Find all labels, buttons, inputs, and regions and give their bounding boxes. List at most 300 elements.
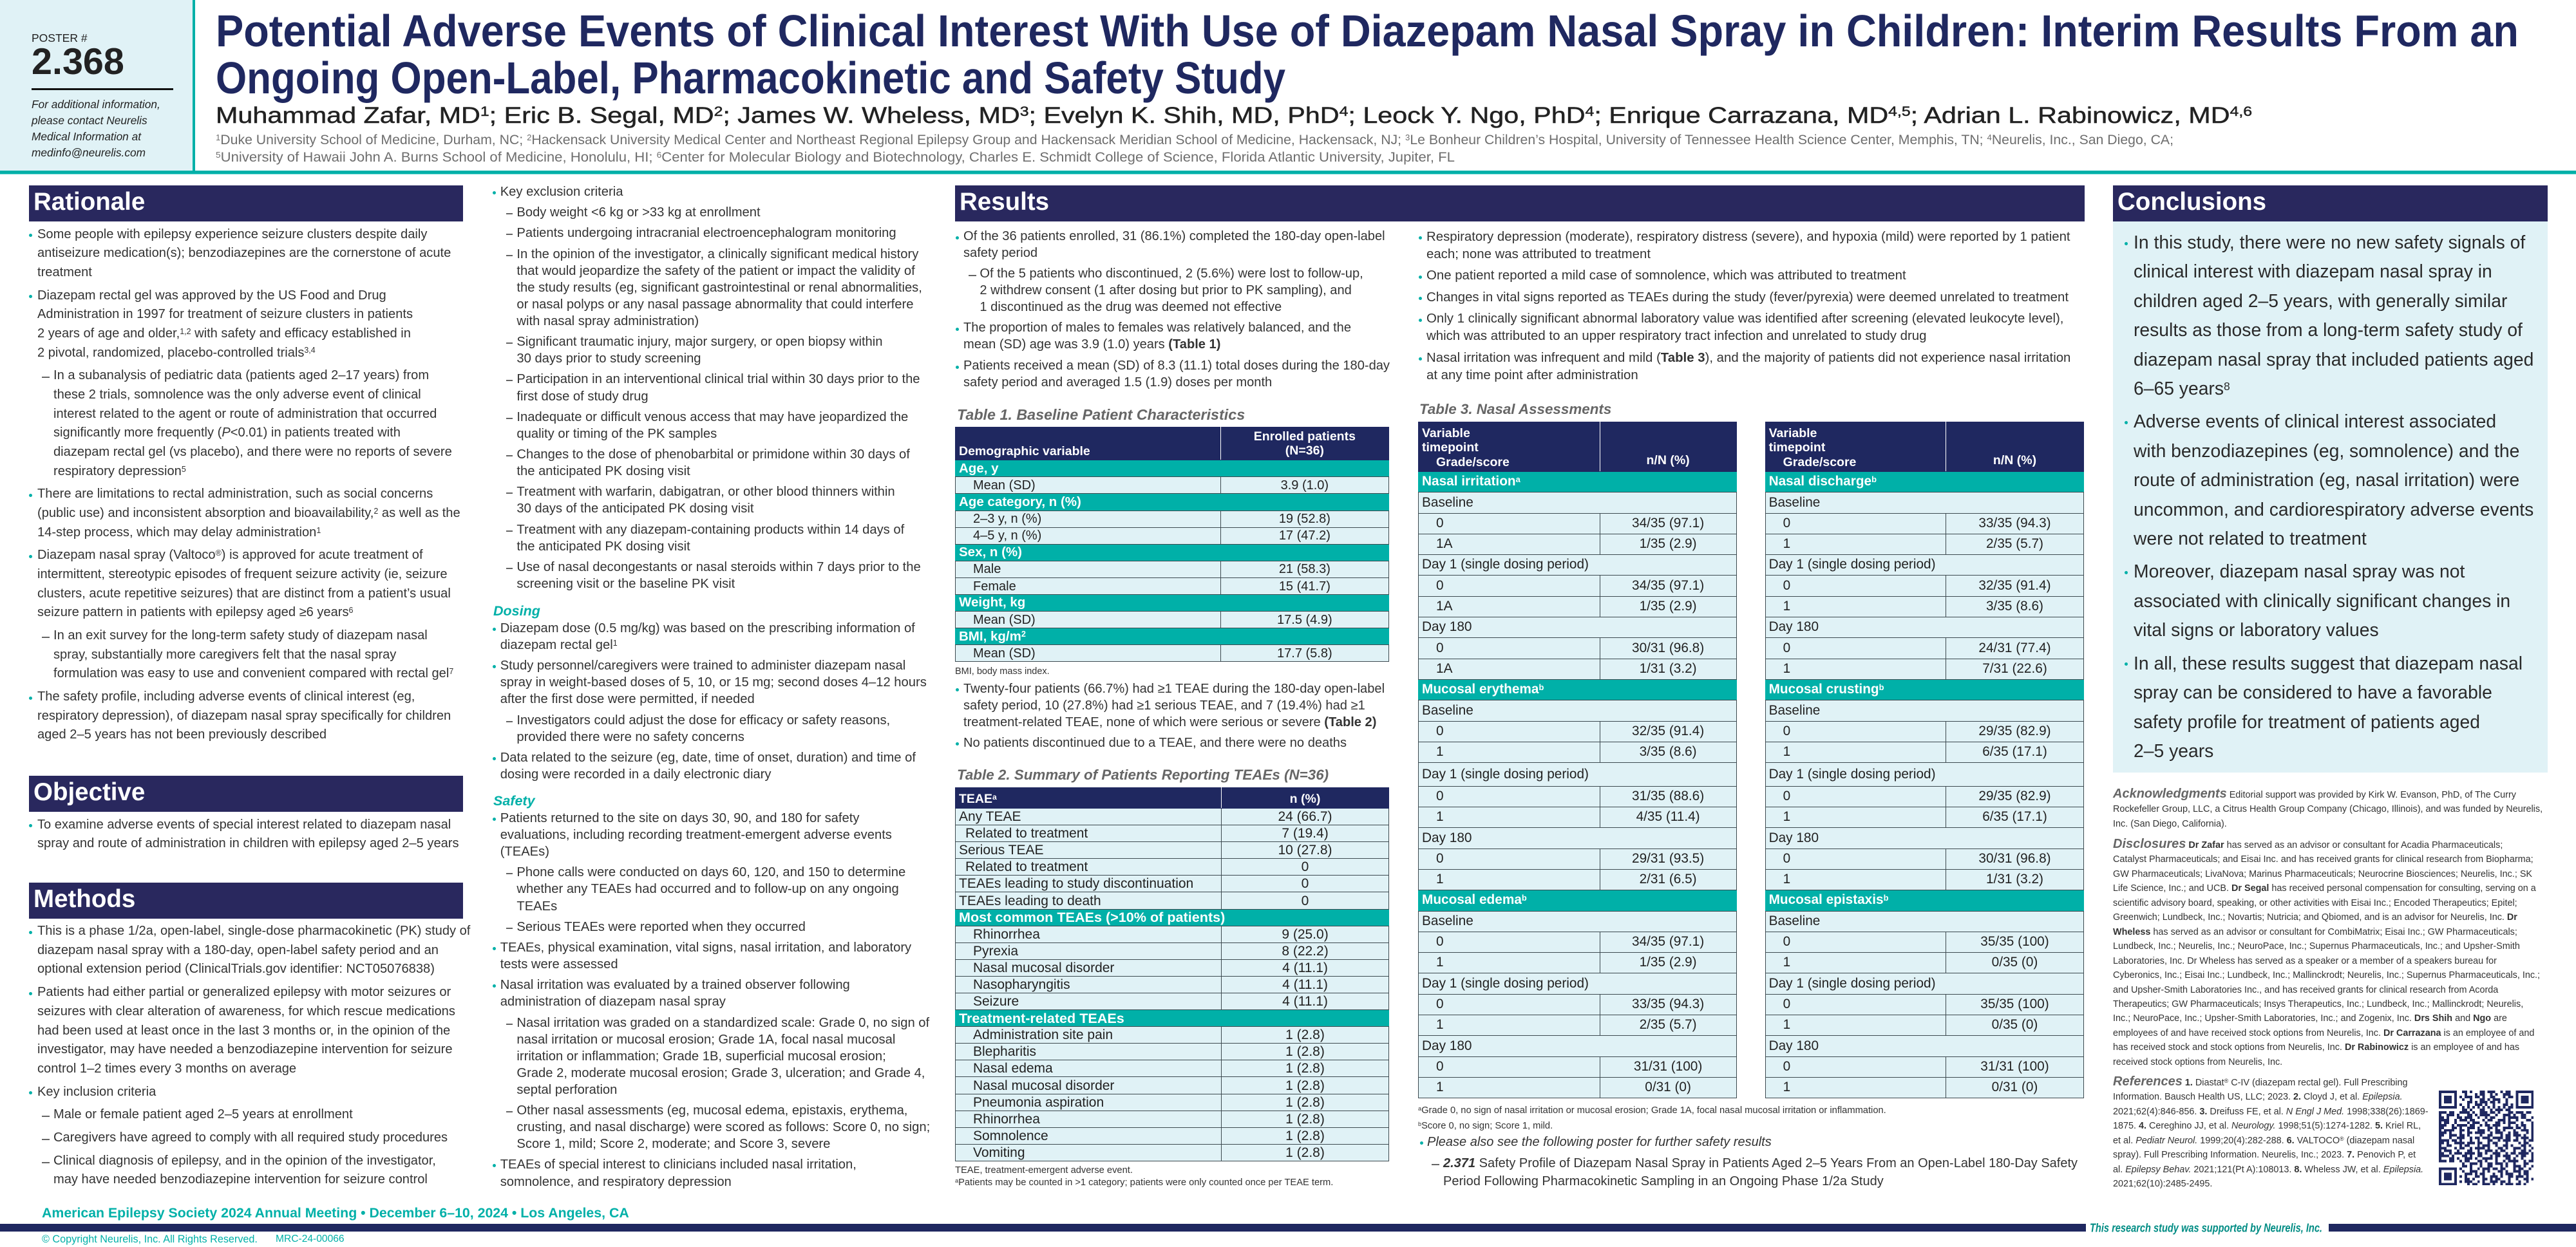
affiliations line 1: 3 xyxy=(1405,133,1410,142)
table 1: baseline characteristics: 17.5 (4.9) xyxy=(1277,613,1332,627)
text block: dosing: provided there were no safety concerns xyxy=(516,730,744,744)
table 3: nasal assessments right: 7/31 (22.6) xyxy=(1982,661,2047,676)
heading: Rationale xyxy=(29,185,463,221)
table 2: TEAE summary: Somnolence xyxy=(973,1129,1048,1143)
table 2: TEAE summary: Rhinorrhea xyxy=(973,1112,1040,1127)
text block: safety: evaluations, including recording treatment-emergent adverse events xyxy=(500,828,892,842)
text block: methods bullets: optional extension period (ClinicalTrials.gov identifier: NCT05076838) xyxy=(37,962,435,976)
text block: disclosures: Laboratories, Inc. Dr Wheless has served as a speaker or a member of a speakers bureau for xyxy=(2113,956,2497,966)
affiliations line 1: 1 xyxy=(216,133,220,142)
text block: rationale bullets: 2 years of age and older,1,2 with safety and efficacy established in xyxy=(37,326,411,341)
text block: TEAE bullets xyxy=(956,682,1385,750)
authors: 1 xyxy=(480,104,489,119)
text block: dosing: Data related to the seizure (eg, date, time of onset, duration) and time of xyxy=(500,751,916,765)
footnote: table 1: BMI, body mass index. xyxy=(955,666,1050,676)
text block: disposition bullets: safety period xyxy=(963,246,1037,260)
table 1: baseline characteristics: Male xyxy=(973,562,1001,576)
table 3: nasal assessments right: Baseline xyxy=(1769,914,1820,928)
table 3: nasal assessments right: 1 xyxy=(1783,1017,1790,1032)
text block: safety findings bullets: One patient reported a mild case of somnolence, which was attributed to treatment xyxy=(1426,268,1906,283)
table 2: TEAE summary: Related to treatment xyxy=(965,826,1088,841)
copyright: © Copyright Neurelis, Inc. All Rights Reserved. xyxy=(42,1233,258,1245)
table 3: nasal assessments left: 0 xyxy=(1436,934,1444,949)
table 3: nasal assessments right: 0 xyxy=(1783,934,1790,949)
table 1: baseline characteristics: 21 (58.3) xyxy=(1279,562,1331,576)
table 3: nasal assessments left: 34/35 (97.1) xyxy=(1632,516,1704,530)
table 2: TEAE summary: 1 (2.8) xyxy=(1285,1095,1325,1110)
panel: conclusions xyxy=(2113,185,2548,773)
authors: 4,5 xyxy=(1888,104,1911,119)
table 3: nasal assessments right: n/N (%) xyxy=(1993,453,2036,467)
text block: rationale bullets: formulation was easy to use and convenient compared with rectal gel7 xyxy=(53,666,453,680)
heading: Methods xyxy=(29,883,463,919)
table 2: TEAE summary: Nasal edema xyxy=(973,1061,1053,1076)
text block: TEAE bullets: treatment-related TEAE, none of which were serious or severe (Table 2) xyxy=(963,715,1376,729)
table 2: TEAE summary: Any TEAE xyxy=(959,809,1021,824)
table 1: baseline characteristics: Enrolled patients xyxy=(1254,429,1356,444)
text block: key exclusion criteria: screening visit or the baseline PK visit xyxy=(516,577,735,591)
table 3: nasal assessments right: 32/35 (91.4) xyxy=(1978,578,2051,593)
text block: rationale bullets: seizure pattern in patients with epilepsy aged ≥6 years6 xyxy=(37,605,353,619)
text block: objective xyxy=(29,818,459,850)
text block: conclusions bullets: spray can be considered to have a favorable xyxy=(2134,682,2492,702)
text block: references: Information. Bausch Health US, LLC; 2023. 2. Cloyd J, et al. Epilepsia. xyxy=(2113,1092,2403,1102)
table 3: nasal assessments right: 0/31 (0) xyxy=(1992,1080,2038,1094)
text block: disclosures: employees of and have received stock options from Neurelis, Inc. Dr Carrazana is an employee of and xyxy=(2113,1028,2534,1038)
copyright: MRC-24-00066 xyxy=(276,1233,345,1244)
table 2: TEAE summary: Seizure xyxy=(973,994,1019,1009)
table 2: TEAE summary: 1 (2.8) xyxy=(1285,1044,1325,1059)
text block: disposition bullets: 2 withdrew consent (1 after dosing but prior to PK sampling), and xyxy=(980,283,1352,297)
text block: safety xyxy=(493,811,930,1189)
table 3: nasal assessments right xyxy=(1765,422,2084,1098)
table 2: TEAE summary: 4 (11.1) xyxy=(1282,977,1328,992)
text block: disclosures: received stock options from Neurelis, Inc. xyxy=(2113,1057,2282,1067)
text block: disclosures: Therapeutics; GW Pharmaceuticals; Insys Therapeutics, Inc.; Lundbeck, Inc.; Mallinckrodt; Neurelis, xyxy=(2113,999,2523,1009)
text block: rationale bullets: spray, substantially more caregivers felt that the nasal spray xyxy=(53,648,396,662)
text block: rationale bullets: Diazepam nasal spray (Valtoco®) is approved for acute treatment of xyxy=(37,548,423,562)
text block: conclusions bullets: diazepam nasal spray that included patients aged xyxy=(2134,349,2533,370)
text block: acknowledgments xyxy=(2112,787,2543,829)
table 3: nasal assessments left: Mucosal erythemab xyxy=(1422,682,1544,697)
table 1: baseline characteristics: Mean (SD) xyxy=(973,613,1036,627)
heading: Results: Results xyxy=(960,188,1049,216)
text block: disposition bullets: Of the 36 patients enrolled, 31 (86.1%) completed the 180-day open-label xyxy=(963,229,1385,243)
table 3: nasal assessments left: 1 xyxy=(1436,1017,1444,1032)
text block: methods bullets: This is a phase 1/2a, open-label, single-dose pharmacokinetic (PK) study of xyxy=(37,924,470,938)
text block: rationale bullets: (public use) and inconsistent absorption and bioavailability,2 as well as the xyxy=(37,506,460,520)
affiliations line 2: University of Hawaii John A. Burns School of Medicine, Honolulu, HI; xyxy=(221,150,657,165)
heading: Objective xyxy=(29,776,463,812)
table 3: nasal assessments left: 34/35 (97.1) xyxy=(1632,934,1704,949)
table 3: nasal assessments right: 0 xyxy=(1783,851,1790,866)
heading: table 1 title: Table 1. Baseline Patient Characteristics xyxy=(957,406,1245,423)
text block: rationale bullets: respiratory depression), of diazepam nasal spray specifically for children xyxy=(37,709,451,723)
text block: disclosures: and Upsher-Smith Laboratories Inc., and has received grants for clinical research from Acorda xyxy=(2113,985,2498,995)
table 3: nasal assessments left: Day 180 xyxy=(1422,830,1472,845)
table 3: nasal assessments right: 0/35 (0) xyxy=(1992,955,2038,970)
text block: key exclusion criteria: the study results (eg, significant gastrointestinal or renal abnormalities, xyxy=(516,281,922,295)
title line 2: Ongoing Open-Label, Pharmacokinetic and Safety Study xyxy=(216,53,1285,103)
table 3: nasal assessments left: Baseline xyxy=(1422,914,1473,928)
text block: rationale bullets: 14-step process, which may delay administration1 xyxy=(37,525,321,539)
footnote: table 2: aPatients may be counted in >1 category; patients were only counted once per TEAE term. xyxy=(955,1177,1333,1188)
text block: safety: irritation or inflammation; Grade 1B, superficial mucosal erosion; xyxy=(516,1049,886,1064)
table 3: nasal assessments left: 1 xyxy=(1436,744,1444,759)
panel: methods xyxy=(29,883,470,1186)
table 3: nasal assessments left: 0 xyxy=(1436,851,1444,866)
table 2: TEAE summary: 4 (11.1) xyxy=(1282,994,1328,1009)
affiliations line 1: 4 xyxy=(1987,133,1992,142)
text block: key exclusion criteria: Inadequate or difficult venous access that may have jeopardized the xyxy=(516,410,908,424)
table 2: TEAE summary: Nasal mucosal disorder xyxy=(973,1078,1114,1093)
table 3: nasal assessments right: Day 1 (single dosing period) xyxy=(1769,557,1936,572)
text block: disclosures: Life Science, Inc.; and UCB. Dr Segal has received personal compensation for consulting, serving on a xyxy=(2113,883,2536,894)
text block: dosing: after the first dose were permitted, if needed xyxy=(500,692,755,706)
table 3: nasal assessments left: 1A xyxy=(1436,536,1452,551)
table 2: TEAE summary xyxy=(955,787,1389,1161)
table 3: nasal assessments left: 0 xyxy=(1436,516,1444,530)
table 3: nasal assessments right: Day 180 xyxy=(1769,1038,1819,1053)
contact note: please contact Neurelis xyxy=(32,114,147,127)
table 2: TEAE summary: 10 (27.8) xyxy=(1278,843,1332,858)
affiliations line 2: 6 xyxy=(657,150,661,160)
authors: 4,6 xyxy=(2230,104,2252,119)
table 3: nasal assessments left: 0 xyxy=(1436,578,1444,593)
text block: safety findings bullets xyxy=(1419,230,2070,382)
text block: key exclusion criteria: Use of nasal decongestants or nasal steroids within 7 days prior to the xyxy=(516,560,921,574)
table 2: TEAE summary: Blepharitis xyxy=(973,1044,1036,1059)
text block: disclosures: Wheless has served as an advisor or consultant for CombiMatrix; Eisai Inc.; GW Pharmaceuticals; xyxy=(2113,927,2517,937)
text block: rationale bullets: clusters, acute repetitive seizures) that are distinct from a patient’s usual xyxy=(37,586,451,601)
text block: rationale bullets: intermittent, stereotypic episodes of frequent seizure activity (ie, seizure xyxy=(37,567,448,581)
affiliations line 1: Hackensack University Medical Center and Northeast Regional Epilepsy Group and Hackensack Meridian School of Medicine, Hackensack, NJ; xyxy=(531,133,1405,147)
table 2: TEAE summary: 1 (2.8) xyxy=(1285,1129,1325,1143)
table 1: baseline characteristics: 19 (52.8) xyxy=(1279,512,1331,526)
text block: key exclusion criteria: 30 days prior to study screening xyxy=(516,352,701,366)
table 1: baseline characteristics: 17 (47.2) xyxy=(1279,529,1331,543)
text block: safety findings bullets: Respiratory depression (moderate), respiratory distress (severe), and hypoxia (mild) were reported by 1 patient xyxy=(1426,230,2070,244)
table 3: nasal assessments left: 1/31 (3.2) xyxy=(1640,661,1697,676)
table 3: nasal assessments right: 1 xyxy=(1783,599,1790,614)
authors: Muhammad Zafar, MD xyxy=(216,103,440,128)
table 3: nasal assessments right: 0 xyxy=(1783,1059,1790,1074)
text block: disposition bullets xyxy=(956,229,1390,389)
heading: Results xyxy=(955,185,2084,221)
table 2: TEAE summary: 9 (25.0) xyxy=(1282,927,1329,942)
text block: conclusions bullets: with benzodiazepines (eg, somnolence) and the xyxy=(2134,440,2519,461)
text block: conclusions bullets: associated with clinically significant changes in xyxy=(2134,590,2510,611)
text block: safety: Other nasal assessments (eg, mucosal edema, epistaxis, erythema, xyxy=(516,1103,907,1118)
authors: ; Adrian L. Rabinowicz, MD xyxy=(1911,103,2230,128)
text block: conclusions bullets: were not related to treatment xyxy=(2134,528,2367,548)
contact note xyxy=(31,98,160,159)
table 3: nasal assessments left: 1/35 (2.9) xyxy=(1640,599,1697,614)
text block: key exclusion criteria: In the opinion of the investigator, a clinically significant medical history xyxy=(516,247,918,261)
text block: disposition bullets: 1 discontinued as the drug was deemed not effective xyxy=(980,300,1282,314)
table 2: TEAE summary: TEAEs leading to study discontinuation xyxy=(959,876,1193,891)
table 3: nasal assessments left: 1/35 (2.9) xyxy=(1640,536,1697,551)
table 2: TEAE summary: Serious TEAE xyxy=(959,843,1044,858)
affiliations line 1: 2 xyxy=(527,133,531,142)
text block: rationale bullets: In an exit survey for the long-term safety study of diazepam nasal xyxy=(53,628,428,642)
heading: Rationale: Rationale xyxy=(33,188,145,216)
text block: dosing: Investigators could adjust the dose for efficacy or safety reasons, xyxy=(516,713,890,727)
table 2: TEAE summary: Administration site pain xyxy=(973,1027,1113,1042)
text block: methods bullets: control 1–2 times every 3 months on average xyxy=(37,1062,296,1076)
text block: methods bullets: diazepam nasal spray with a 180-day, open-label safety period and an xyxy=(37,943,439,957)
table 3: nasal assessments left: Day 1 (single dosing period) xyxy=(1422,767,1589,782)
header: title, authors and affiliations xyxy=(216,6,2519,165)
footnote: table 2 xyxy=(955,1165,1333,1188)
authors: 2 xyxy=(714,104,723,119)
text block: disclosures: Disclosures Dr Zafar has served as an advisor or consultant for Acadia Pharmaceuticals; xyxy=(2113,837,2503,851)
text block: key exclusion criteria: Patients undergoing intracranial electroencephalogram monitoring xyxy=(516,226,896,240)
table 3: nasal assessments left: 1 xyxy=(1436,1080,1444,1094)
text block: conclusions bullets: In all, these results suggest that diazepam nasal xyxy=(2134,653,2523,673)
text block: rationale bullets: treatment xyxy=(37,265,92,279)
text block: safety findings bullets: at any time point after administration xyxy=(1426,368,1638,382)
text block: safety findings bullets: each; none was attributed to treatment xyxy=(1426,247,1651,261)
text block: methods bullets: Key inclusion criteria xyxy=(37,1085,156,1099)
table 3: nasal assessments right: 6/35 (17.1) xyxy=(1982,744,2047,759)
text block: safety: (TEAEs) xyxy=(500,845,549,859)
table 3: nasal assessments right: 29/35 (82.9) xyxy=(1978,724,2051,738)
text block: disposition bullets: safety period and averaged 1.5 (1.9) doses per month xyxy=(963,375,1272,389)
text block: disposition bullets: Patients received a mean (SD) of 8.3 (11.1) total doses during the 180-day xyxy=(963,359,1390,373)
table 1: baseline characteristics: 4–5 y, n (%) xyxy=(973,529,1041,543)
panel: acknowledgments, disclosures, references xyxy=(2112,787,2543,1189)
table 3: nasal assessments left: 0/31 (0) xyxy=(1645,1080,1691,1094)
text block: rationale bullets: There are limitations to rectal administration, such as social concerns xyxy=(37,487,433,501)
table 3: nasal assessments right: Variable xyxy=(1769,426,1817,440)
table 3: nasal assessments left: 0 xyxy=(1436,997,1444,1011)
table 3: nasal assessments right: 0 xyxy=(1783,578,1790,593)
text block: methods bullets: investigator, may have needed a benzodiazepine intervention for seizure xyxy=(37,1042,453,1056)
text block: acknowledgments: Acknowledgments Editorial support was provided by Kirk W. Evanson, PhD, of The Curry xyxy=(2113,787,2516,801)
table 3: nasal assessments left: timepoint xyxy=(1422,440,1479,455)
text block: dosing: Study personnel/caregivers were trained to administer diazepam nasal xyxy=(500,659,905,673)
text block: disclosures: GW Pharmaceuticals; LivaNova; Marinus Pharmaceuticals; Neurocrine Biosciences; Neurelis, Inc.; SK xyxy=(2113,869,2532,879)
table 3: nasal assessments right: 33/35 (94.3) xyxy=(1978,516,2051,530)
text block: dosing: spray in weight-based doses of 5, 10, or 15 mg; second doses 4–12 hours xyxy=(500,675,927,689)
subheading: Dosing: Dosing xyxy=(493,603,540,619)
text block: further safety results pointer xyxy=(1420,1135,2078,1188)
text block: key exclusion criteria: Treatment with any diazepam-containing products within 14 days of xyxy=(516,523,904,537)
text block: safety: Nasal irritation was graded on a standardized scale: Grade 0, no sign of xyxy=(516,1016,929,1030)
icon: QR code xyxy=(2439,1091,2533,1185)
table 2: TEAE summary: Rhinorrhea xyxy=(973,927,1040,942)
text block: rationale bullets: 2 pivotal, randomized, placebo-controlled trials3,4 xyxy=(37,346,316,360)
table 3: nasal assessments right: 1/31 (3.2) xyxy=(1986,872,2043,886)
table 2: TEAE summary: 0 xyxy=(1302,859,1309,874)
table 1: baseline characteristics: Sex, n (%) xyxy=(959,545,1022,559)
table 3: nasal assessments right: 35/35 (100) xyxy=(1980,934,2049,949)
text block: safety: Nasal irritation was evaluated by a trained observer following xyxy=(500,978,850,992)
authors: 4 xyxy=(1340,104,1349,119)
text block: rationale bullets xyxy=(29,227,460,742)
text block: key exclusion criteria: Treatment with warfarin, dabigatran, or other blood thinners within xyxy=(516,485,895,499)
table 2: TEAE summary: 24 (66.7) xyxy=(1278,809,1332,824)
table 3: nasal assessments left: Variable xyxy=(1422,426,1470,440)
table 3: nasal assessments right: 31/31 (100) xyxy=(1980,1059,2049,1074)
table 3: nasal assessments left: 31/35 (88.6) xyxy=(1632,789,1704,803)
table 2: TEAE summary: n (%) xyxy=(1290,792,1320,806)
table 3: nasal assessments left: 31/31 (100) xyxy=(1634,1059,1702,1074)
text block: rationale bullets: In a subanalysis of pediatric data (patients aged 2–17 years) from xyxy=(53,368,429,382)
text block: disclosures xyxy=(2113,837,2540,1067)
table 2: TEAE summary: Related to treatment xyxy=(965,859,1088,874)
table 3: nasal assessments left: Day 1 (single dosing period) xyxy=(1422,557,1589,572)
text block: safety: nasal irritation or mucosal erosion; Grade 1A, focal nasal mucosal xyxy=(516,1033,895,1047)
text block: further safety results pointer: Please also see the following poster for further safety results xyxy=(1427,1135,1772,1149)
text block: references xyxy=(2113,1074,2429,1189)
table 3: nasal assessments right: 1 xyxy=(1783,809,1790,824)
text block: safety: tests were assessed xyxy=(500,957,618,971)
table 2: TEAE summary: 8 (22.2) xyxy=(1282,944,1329,959)
text block: safety: TEAEs xyxy=(516,899,557,914)
contact note: For additional information, xyxy=(32,98,160,111)
text block: disclosures: Lundbeck, Inc.; Neurelis, Inc.; NeuroPace, Inc.; Supernus Pharmaceuticals, Inc.; and Upsher-Smith xyxy=(2113,941,2520,952)
table 3: nasal assessments left: 32/35 (91.4) xyxy=(1632,724,1704,738)
text block: dosing: Diazepam dose (0.5 mg/kg) was based on the prescribing information of xyxy=(500,621,915,635)
text block: safety findings bullets: Changes in vital signs reported as TEAEs during the study (fever/pyrexia) were deemed unrelated to treatment xyxy=(1426,290,2069,305)
table 3: nasal assessments left: 2/31 (6.5) xyxy=(1640,872,1697,886)
panel: rationale xyxy=(29,185,463,742)
heading: table 2 title: Table 2. Summary of Patients Reporting TEAEs (N=36) xyxy=(957,767,1329,783)
table 3: nasal assessments left: Grade/score xyxy=(1436,455,1510,469)
table 3: nasal assessments right: 1 xyxy=(1783,872,1790,886)
table 3: nasal assessments right: 29/35 (82.9) xyxy=(1978,789,2051,803)
text block: rationale bullets: respiratory depression5 xyxy=(53,464,186,478)
text block: rationale bullets: Some people with epilepsy experience seizure clusters despite daily xyxy=(37,227,427,241)
text block: safety: administration of diazepam nasal spray xyxy=(500,995,726,1009)
table 3: nasal assessments right: 6/35 (17.1) xyxy=(1982,809,2047,824)
table 1: baseline characteristics: Mean (SD) xyxy=(973,646,1036,661)
table 3: nasal assessments left: n/N (%) xyxy=(1647,453,1690,467)
text block: references: References 1. Diastat® C-IV (diazepam rectal gel). Full Prescribing xyxy=(2113,1074,2408,1089)
table 1: baseline characteristics: Age category, n (%) xyxy=(959,494,1081,509)
heading: Methods: Methods xyxy=(33,885,135,913)
text block: references: et al. Pediatr Neurol. 1999;20(4):282-288. 6. VALTOCO® (diazepam nasal xyxy=(2113,1136,2414,1146)
text block: safety: septal perforation xyxy=(516,1083,617,1097)
table 3: nasal assessments right: 3/35 (8.6) xyxy=(1986,599,2043,614)
text block: conclusions bullets xyxy=(2113,221,2548,773)
table 3: nasal assessments left: Baseline xyxy=(1422,703,1473,718)
text block: conclusions bullets: clinical interest with diazepam nasal spray in xyxy=(2134,261,2492,281)
text block: conclusions bullets: uncommon, and cardiorespiratory adverse events xyxy=(2134,499,2533,520)
text block: acknowledgments: Rockefeller Group, LLC, a Citrus Health Group Company (Chicago, Illinois), and was funded by Neurelis, xyxy=(2113,804,2543,814)
text block: conclusions bullets: 2–5 years xyxy=(2134,740,2213,761)
text block: safety: Grade 2, moderate mucosal erosion; Grade 3, ulceration; and Grade 4, xyxy=(516,1066,925,1080)
table 3: nasal assessments right: Day 180 xyxy=(1769,830,1819,845)
text block: key exclusion criteria: the anticipated PK dosing visit xyxy=(516,464,690,478)
table 2: TEAE summary: Treatment-related TEAEs xyxy=(959,1010,1124,1026)
table 3: nasal assessments right: 1 xyxy=(1783,1080,1790,1094)
table 3: nasal assessments left: Day 1 (single dosing period) xyxy=(1422,976,1589,991)
text block: key exclusion criteria: Significant traumatic injury, major surgery, or open biopsy within xyxy=(516,335,882,349)
text block: references: al. Epilepsy Behav. 2021;121(Pt A):108013. 8. Wheless JW, et al. Epilepsia. xyxy=(2113,1165,2423,1175)
footnote: table 3: bScore 0, no sign; Score 1, mild. xyxy=(1418,1121,1553,1131)
table 3: nasal assessments right: Baseline xyxy=(1769,703,1820,718)
table 2: TEAE summary: 4 (11.1) xyxy=(1282,961,1328,975)
table 3: nasal assessments right: timepoint xyxy=(1769,440,1825,455)
table 3: nasal assessments right: 0 xyxy=(1783,516,1790,530)
table 2: TEAE summary: Nasal mucosal disorder xyxy=(973,961,1114,975)
table 1: baseline characteristics: Mean (SD) xyxy=(973,478,1036,492)
table 3: nasal assessments right: Mucosal crustingb xyxy=(1769,682,1884,697)
meeting line: American Epilepsy Society 2024 Annual Meeting • December 6–10, 2024 • Los Angeles, CA xyxy=(42,1205,629,1221)
table 2: TEAE summary: Nasopharyngitis xyxy=(973,977,1070,992)
panel: objective xyxy=(29,776,463,850)
text block: key exclusion criteria: first dose of study drug xyxy=(516,389,649,403)
text block: TEAE bullets: Twenty-four patients (66.7%) had ≥1 TEAE during the 180-day open-label xyxy=(963,682,1385,696)
table 3: nasal assessments right: 1 xyxy=(1783,536,1790,551)
table 3: nasal assessments right: Mucosal epistaxisb xyxy=(1769,892,1888,907)
table 3: nasal assessments left: 1A xyxy=(1436,599,1452,614)
table 3: nasal assessments right: 0 xyxy=(1783,789,1790,803)
table 3: nasal assessments right: 24/31 (77.4) xyxy=(1978,641,2051,655)
text block: key exclusion criteria: Participation in an interventional clinical trial within 30 days prior to the xyxy=(516,372,920,386)
affiliations line 2: Center for Molecular Biology and Biotechnology, Charles E. Schmidt College of Science, Florida Atlantic University, Jupiter, FL xyxy=(661,150,1455,165)
poster label: POSTER # xyxy=(32,32,88,44)
table 3: nasal assessments right: Day 1 (single dosing period) xyxy=(1769,767,1936,782)
table 3: nasal assessments right: 0/35 (0) xyxy=(1992,1017,2038,1032)
text block: conclusions bullets: In this study, there were no new safety signals of xyxy=(2134,232,2525,252)
text block: disclosures: Inc.; NeuroPace, Inc.; Upsher-Smith Laboratories, Inc.; and Zogenix, Inc. Drs Shih and Ngo are xyxy=(2113,1013,2507,1024)
table 2: TEAE summary: Vomiting xyxy=(973,1145,1025,1160)
text block: disposition bullets: The proportion of males to females was relatively balanced, and the xyxy=(963,321,1351,335)
footnote: table 3 xyxy=(1418,1105,1886,1131)
table 3: nasal assessments left: Day 180 xyxy=(1422,619,1472,634)
text block: rationale bullets: significantly more frequently (P<0.01) in patients treated with xyxy=(53,426,401,440)
table 3: nasal assessments left: 33/35 (94.3) xyxy=(1632,997,1704,1011)
table 3: nasal assessments right: 0 xyxy=(1783,997,1790,1011)
text block: methods bullets: may have needed benzodiazepine intervention for seizure control xyxy=(53,1172,428,1186)
text block: dosing xyxy=(493,621,927,782)
table 3: nasal assessments left: 1 xyxy=(1436,955,1444,970)
text block: further safety results pointer: 2.371 Safety Profile of Diazepam Nasal Spray in Patients Aged 2–5 Years From an Open-Label 180-Day Safety xyxy=(1443,1156,2078,1170)
table 2: TEAE summary: 0 xyxy=(1302,876,1309,891)
text block: key exclusion criteria: Body weight <6 kg or >33 kg at enrollment xyxy=(516,205,761,220)
table 3: nasal assessments right: 35/35 (100) xyxy=(1980,997,2049,1011)
table 3: nasal assessments left: 0 xyxy=(1436,641,1444,655)
table 2: TEAE summary: 1 (2.8) xyxy=(1285,1061,1325,1076)
table 2: TEAE summary: 1 (2.8) xyxy=(1285,1027,1325,1042)
table 3: nasal assessments right: 0 xyxy=(1783,724,1790,738)
authors: 3 xyxy=(1020,104,1029,119)
table 3: nasal assessments right: 2/35 (5.7) xyxy=(1986,536,2043,551)
authors: ; Eric B. Segal, MD xyxy=(489,103,714,128)
authors: ; Leock Y. Ngo, PhD xyxy=(1348,103,1586,128)
text block: safety findings bullets: which was attributed to an upper respiratory tract infection and unrelated to study drug xyxy=(1426,329,1926,343)
table 3: nasal assessments left xyxy=(1418,422,1737,1098)
table 2: TEAE summary: 1 (2.8) xyxy=(1285,1112,1325,1127)
text block: methods bullets: Male or female patient aged 2–5 years at enrollment xyxy=(53,1107,353,1121)
panel: methods continued xyxy=(493,185,930,1189)
text block: rationale bullets: diazepam rectal gel (vs placebo), and there were no reports of severe xyxy=(53,445,452,459)
text block: methods bullets xyxy=(29,924,470,1186)
table 2: TEAE summary: TEAEa xyxy=(959,792,997,806)
text block: acknowledgments: Inc. (San Diego, California). xyxy=(2113,819,2227,829)
text block: key exclusion criteria: or nasal polyps or any nasal passage abnormality that could interfere xyxy=(516,297,913,312)
text block: conclusions bullets: Adverse events of clinical interest associated xyxy=(2134,411,2496,431)
text block: methods bullets: Caregivers have agreed to comply with all required study procedures xyxy=(53,1130,448,1145)
table 3: nasal assessments left: 3/35 (8.6) xyxy=(1640,744,1697,759)
table 2: TEAE summary: 0 xyxy=(1302,894,1309,908)
table 3: nasal assessments right: Nasal dischargeb xyxy=(1769,474,1877,489)
text block: methods bullets: seizures with clear alteration of awareness, for which rescue medications xyxy=(37,1004,455,1018)
